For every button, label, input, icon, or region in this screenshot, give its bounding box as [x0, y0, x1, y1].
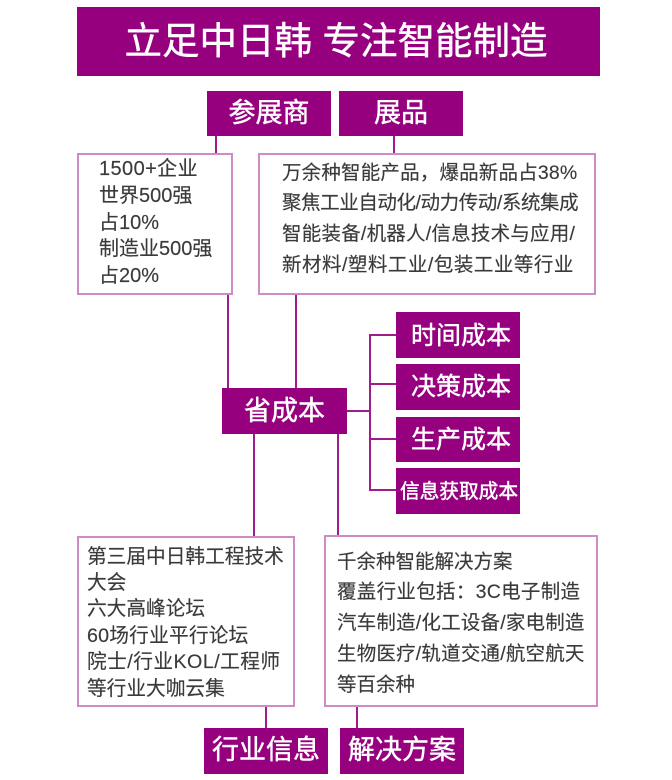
central node: save cost: 省成本 — [244, 396, 325, 426]
cost box: information access — [396, 468, 520, 514]
heading: solutions: 解决方案 — [348, 735, 456, 765]
connector: exhibits to box — [393, 136, 395, 153]
title banner — [77, 7, 600, 76]
panel: industry information: 第三届中日韩工程技术 — [87, 546, 284, 568]
panel: solutions — [324, 535, 598, 707]
cost box: time: 时间成本 — [411, 322, 511, 350]
connector: exhibitors to box — [215, 136, 217, 153]
panel: solutions: 等百余种 — [337, 674, 415, 696]
connector: industry panel to heading — [265, 707, 267, 728]
heading: industry information — [204, 728, 328, 774]
panel: solutions: 千余种智能解决方案 — [337, 550, 513, 572]
connector: save cost to industry info — [253, 434, 255, 536]
connector tree: save cost to cost types — [347, 334, 396, 491]
panel: solutions: 汽车制造/化工设备/家电制造 — [337, 612, 585, 634]
panel: exhibits: 聚焦工业自动化/动力传动/系统集成 — [282, 192, 578, 214]
cost box: decision: 决策成本 — [411, 373, 511, 401]
panel: exhibitors: 占10% — [99, 212, 159, 234]
title banner: 立足中日韩 专注智能制造 — [125, 20, 547, 62]
panel: exhibitors: 占20% — [99, 265, 159, 287]
panel: solutions: 生物医疗/轨道交通/航空航天 — [337, 643, 585, 665]
panel: exhibitors: 1500+企业 — [99, 158, 198, 180]
heading: exhibits: 展品 — [374, 98, 428, 128]
panel: industry information: 院士/行业KOL/工程师 — [87, 651, 281, 673]
heading: solutions — [340, 728, 464, 774]
panel: industry information — [77, 536, 295, 707]
panel: exhibitors — [77, 153, 233, 295]
central node: save cost — [222, 388, 347, 434]
panel: industry information: 等行业大咖云集 — [87, 678, 225, 700]
panel: exhibitors: 制造业500强 — [99, 238, 212, 260]
panel: industry information: 60场行业平行论坛 — [87, 625, 249, 647]
panel: exhibits: 智能装备/机器人/信息技术与应用/ — [282, 223, 575, 245]
panel: industry information: 六大高峰论坛 — [87, 598, 205, 620]
panel: exhibits: 万余种智能产品，爆品新品占38% — [282, 162, 577, 184]
heading: exhibits — [339, 91, 463, 136]
connector: exhibitors panel to save cost — [227, 295, 229, 388]
connector: save cost to solutions — [337, 434, 339, 535]
heading: exhibitors — [207, 91, 331, 136]
heading: industry information: 行业信息 — [212, 735, 320, 765]
panel: industry information: 大会 — [87, 572, 126, 594]
connector: exhibits panel to save cost — [295, 295, 297, 388]
connector: solutions panel to heading — [356, 707, 358, 728]
panel: solutions: 覆盖行业包括：3C电子制造 — [337, 581, 580, 603]
cost box: information access: 信息获取成本 — [400, 481, 518, 503]
cost box: production — [396, 417, 520, 462]
panel: exhibits: 新材料/塑料工业/包装工业等行业 — [282, 254, 574, 276]
cost box: decision — [396, 364, 520, 410]
cost box: production: 生产成本 — [411, 426, 511, 454]
cost box: time — [396, 312, 520, 358]
panel: exhibitors: 世界500强 — [99, 185, 192, 207]
panel: exhibits — [258, 153, 596, 295]
heading: exhibitors: 参展商 — [228, 98, 310, 128]
